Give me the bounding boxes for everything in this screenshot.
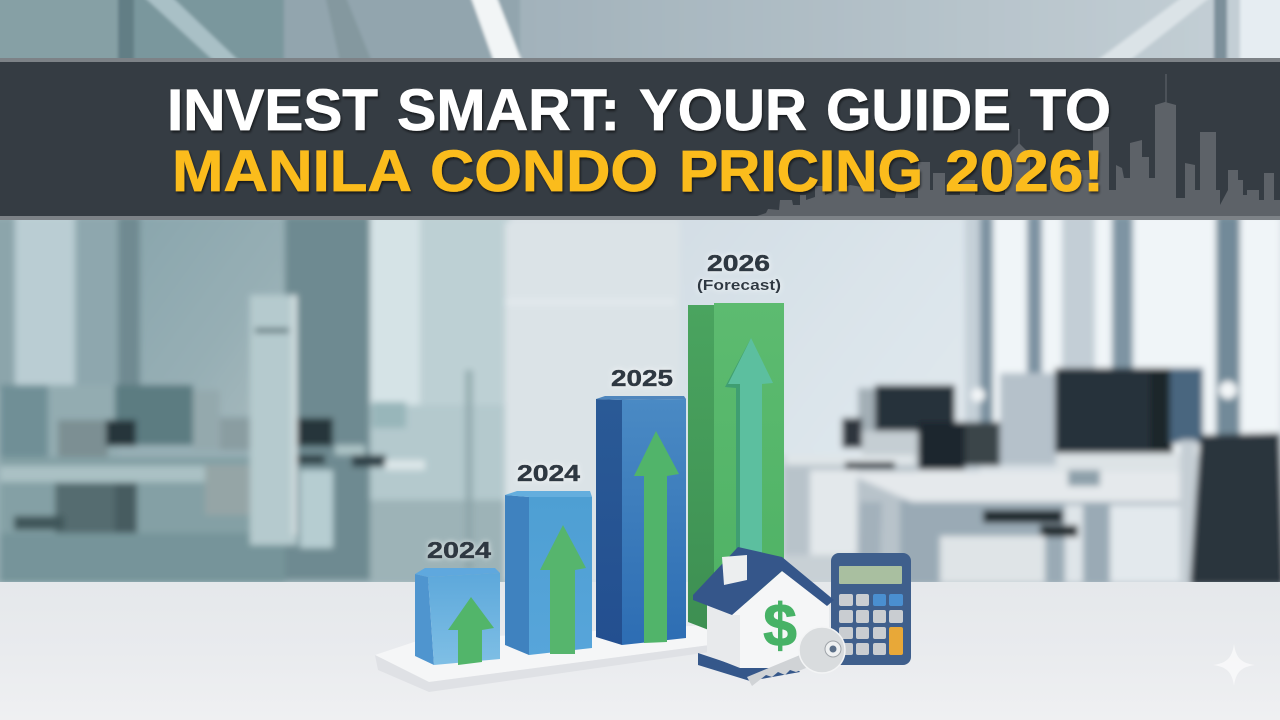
icon: house with dollar sign: $ [763,592,797,659]
icon: house with dollar sign [693,547,834,681]
year labels [427,250,781,563]
glass wall, left [0,215,510,585]
icon: calculator [831,553,911,665]
year labels: 2024 [517,460,580,486]
year labels: 2026 [707,250,770,276]
title text line 2: 2026! [945,139,1104,204]
year labels: 2025 [611,365,673,391]
year labels: (Forecast) [697,278,781,294]
icon: sparkle watermark [1213,644,1255,686]
bar 2026 forecast [688,303,784,632]
right wall [680,215,970,585]
left desk and drawers [782,455,917,585]
middle wall [505,222,685,582]
tabletop [0,582,1280,720]
title text line 2: MANILA [172,139,412,204]
title text line 1 [167,78,1111,143]
bar 2024 (second) [505,491,592,655]
icon: silver key [747,627,845,686]
title text line 1: GUIDE [826,78,1011,143]
title text line 1: INVEST [167,78,378,143]
title banner [0,58,1280,220]
title text line 2: PRICING [679,139,923,204]
city skyline silhouette [757,74,1280,216]
bar 2024 (first) [415,568,500,665]
title text line 1: SMART: [397,78,620,143]
year labels: 2024 [427,537,491,563]
title text line 1: YOUR [639,78,807,143]
title text line 1: TO [1030,78,1111,143]
monitors [858,388,878,438]
title text line 2: CONDO [430,139,658,204]
windows and mullions [980,215,1280,455]
bar chart: rising price bars [415,303,784,665]
bar 2025 [596,396,686,645]
under-desk area [900,500,1200,585]
chart base plate [375,625,710,692]
title text line 2 [172,139,1104,204]
